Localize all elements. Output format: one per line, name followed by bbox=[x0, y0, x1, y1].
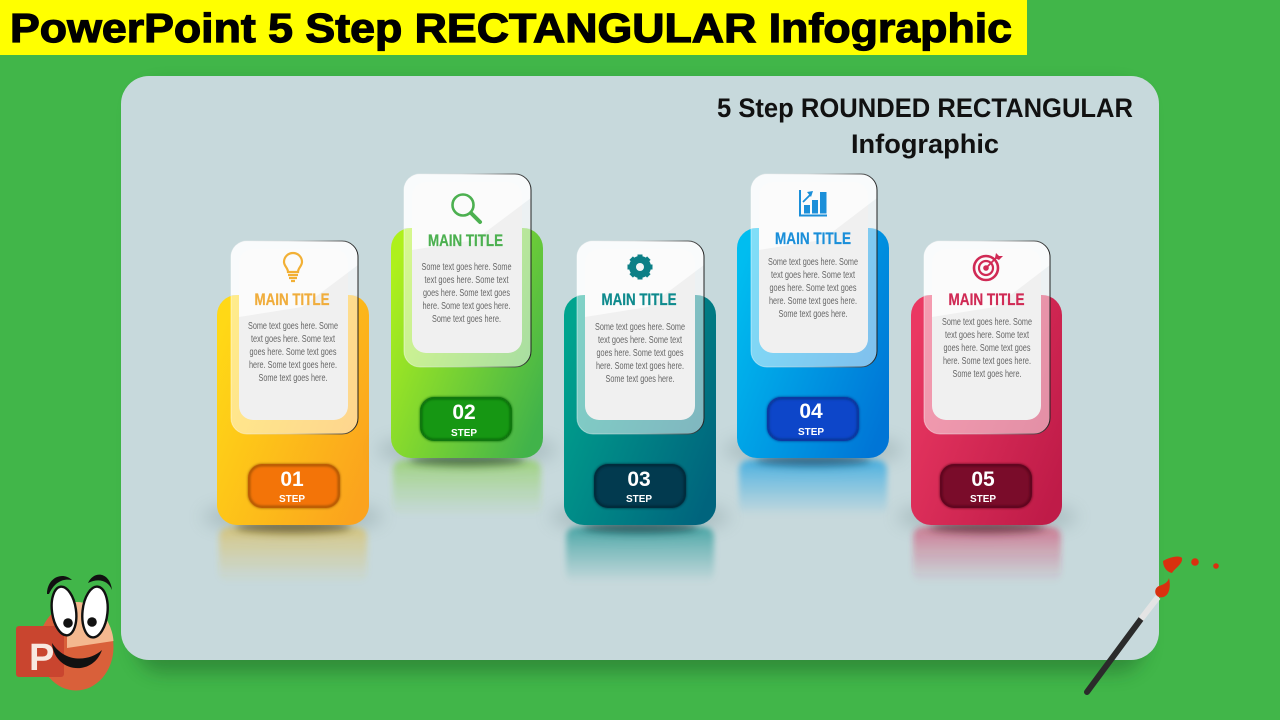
panel heading bbox=[717, 93, 1133, 159]
icon: target bbox=[974, 253, 1003, 280]
step badge: 02 bbox=[452, 401, 476, 424]
title: MAIN TITLE bbox=[948, 290, 1024, 309]
body text: text goes here. Some text bbox=[771, 270, 855, 281]
body text: Some text goes here. bbox=[606, 374, 674, 385]
body text: here. Some text goes here. bbox=[943, 356, 1031, 367]
step 04 card bbox=[723, 174, 903, 516]
mascot: PowerPoint logo face: P bbox=[29, 637, 54, 679]
body text: text goes here. Some text bbox=[598, 335, 682, 346]
step badge: STEP bbox=[451, 428, 477, 439]
mascot: PowerPoint logo face bbox=[16, 575, 114, 690]
body text: goes here. Some text goes bbox=[770, 283, 856, 294]
body text: Some text goes here. Some bbox=[248, 321, 338, 332]
step badge bbox=[940, 464, 1032, 508]
body text bbox=[595, 322, 685, 385]
icon: bar chart bbox=[800, 190, 827, 216]
icon: gear bbox=[622, 249, 658, 285]
icon: magnifying glass bbox=[452, 194, 480, 222]
title: MAIN TITLE bbox=[254, 290, 330, 309]
step badge: STEP bbox=[798, 427, 824, 438]
icon: light bulb bbox=[284, 253, 302, 281]
body text: Some text goes here. Some bbox=[595, 322, 685, 333]
body text: here. Some text goes here. bbox=[422, 301, 510, 312]
step badge bbox=[594, 464, 686, 508]
body text: here. Some text goes here. bbox=[249, 360, 337, 371]
title: MAIN TITLE bbox=[428, 231, 503, 250]
step badge bbox=[767, 397, 859, 441]
step badge: 04 bbox=[799, 400, 823, 423]
body text: Some text goes here. Some bbox=[768, 257, 858, 268]
body text: Some text goes here. bbox=[258, 373, 328, 384]
step 05 card bbox=[897, 241, 1077, 583]
body text: goes here. Some text goes bbox=[596, 348, 684, 359]
body text: Some text goes here. Some bbox=[422, 262, 512, 273]
body text bbox=[768, 257, 858, 320]
body text: text goes here. Some text bbox=[424, 275, 509, 286]
icon: paint brush bbox=[1087, 557, 1219, 692]
body text: goes here. Some text goes bbox=[944, 343, 1030, 354]
body text: here. Some text goes here. bbox=[769, 296, 857, 307]
body text bbox=[248, 321, 338, 384]
step badge: STEP bbox=[970, 494, 996, 505]
body text: text goes here. Some text bbox=[251, 334, 335, 345]
body text bbox=[942, 317, 1032, 380]
step badge bbox=[248, 464, 340, 508]
step badge: 05 bbox=[971, 468, 995, 491]
step badge: 03 bbox=[627, 468, 651, 491]
body text: goes here. Some text goes bbox=[250, 347, 336, 358]
panel shadow bbox=[135, 85, 1145, 673]
body text: Some text goes here. bbox=[778, 309, 848, 320]
step 03 card bbox=[550, 241, 730, 583]
panel heading: 5 Step ROUNDED RECTANGULAR bbox=[717, 93, 1133, 123]
body text: here. Some text goes here. bbox=[596, 361, 684, 372]
body text: goes here. Some text goes bbox=[423, 288, 510, 299]
panel heading: Infographic bbox=[851, 129, 999, 159]
step 02 card bbox=[377, 174, 557, 516]
step 01 card bbox=[203, 241, 383, 583]
step badge bbox=[420, 397, 512, 441]
title: MAIN TITLE bbox=[602, 290, 676, 309]
body text: text goes here. Some text bbox=[945, 330, 1029, 341]
body text: Some text goes here. Some bbox=[942, 317, 1032, 328]
title: MAIN TITLE bbox=[775, 229, 851, 248]
step badge: 01 bbox=[280, 468, 304, 491]
step badge: STEP bbox=[279, 494, 305, 505]
body text: Some text goes here. bbox=[432, 314, 501, 325]
body text: Some text goes here. bbox=[952, 369, 1022, 380]
title banner: PowerPoint 5 Step RECTANGULAR Infographic bbox=[10, 5, 1012, 51]
step badge: STEP bbox=[626, 494, 652, 505]
body text bbox=[422, 262, 512, 325]
main panel bbox=[121, 76, 1159, 660]
